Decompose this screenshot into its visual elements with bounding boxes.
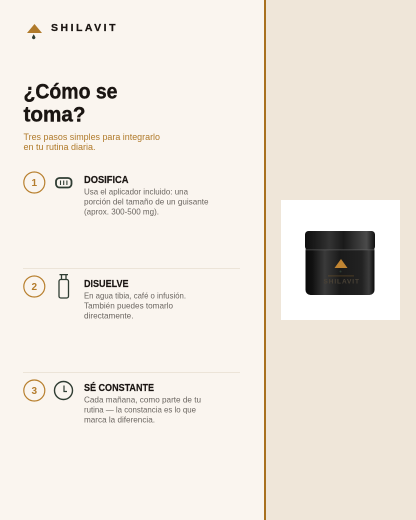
step heading: SÉ CONSTANTE xyxy=(84,381,154,394)
step description: porción del tamaño de un guisante xyxy=(84,196,209,206)
number badge 2 xyxy=(24,276,45,297)
step description xyxy=(84,186,209,216)
panel: right background xyxy=(264,0,416,520)
number badge 1: 1 xyxy=(32,178,38,189)
number badge 1 xyxy=(24,172,45,193)
number badge 3 xyxy=(24,380,45,401)
icon: logo mountain and drop xyxy=(27,24,42,39)
icon: clock xyxy=(54,382,72,400)
step description: En agua tibia, café o infusión. xyxy=(84,290,186,300)
vertical accent line xyxy=(264,0,266,520)
icon: bottle xyxy=(59,275,68,298)
subtitle: en tu rutina diaria. xyxy=(24,142,96,152)
number badge 3: 3 xyxy=(32,386,38,397)
logo xyxy=(27,22,116,39)
brand name: SHILAVIT xyxy=(51,22,116,34)
product image xyxy=(281,200,400,320)
step 3 xyxy=(24,380,201,424)
step description xyxy=(84,394,201,424)
step heading: DISUELVE xyxy=(84,279,129,290)
step description: rutina — la constancia es lo que xyxy=(84,404,196,414)
step description: directamente. xyxy=(84,310,134,320)
step description: Cada mañana, como parte de tu xyxy=(84,394,201,404)
subtitle: Tres pasos simples para integrarlo xyxy=(24,132,160,142)
step description: También puedes tomarlo xyxy=(84,300,173,310)
step description: marca la diferencia. xyxy=(84,414,155,424)
number badge 2: 2 xyxy=(32,282,38,293)
step description: Usa el aplicador incluido: una xyxy=(84,186,188,196)
title: ¿Cómo se xyxy=(24,80,118,104)
jar: SHILAVIT xyxy=(324,278,359,286)
step description xyxy=(84,290,186,320)
step 2 xyxy=(24,275,186,320)
step heading: DOSIFICA xyxy=(84,175,129,186)
step description: (aprox. 300-500 mg). xyxy=(84,206,159,216)
step 1 xyxy=(24,172,209,216)
subtitle xyxy=(24,132,160,152)
panel: left background xyxy=(0,0,264,520)
icon: applicator xyxy=(56,178,72,188)
title second line: toma? xyxy=(24,104,86,126)
